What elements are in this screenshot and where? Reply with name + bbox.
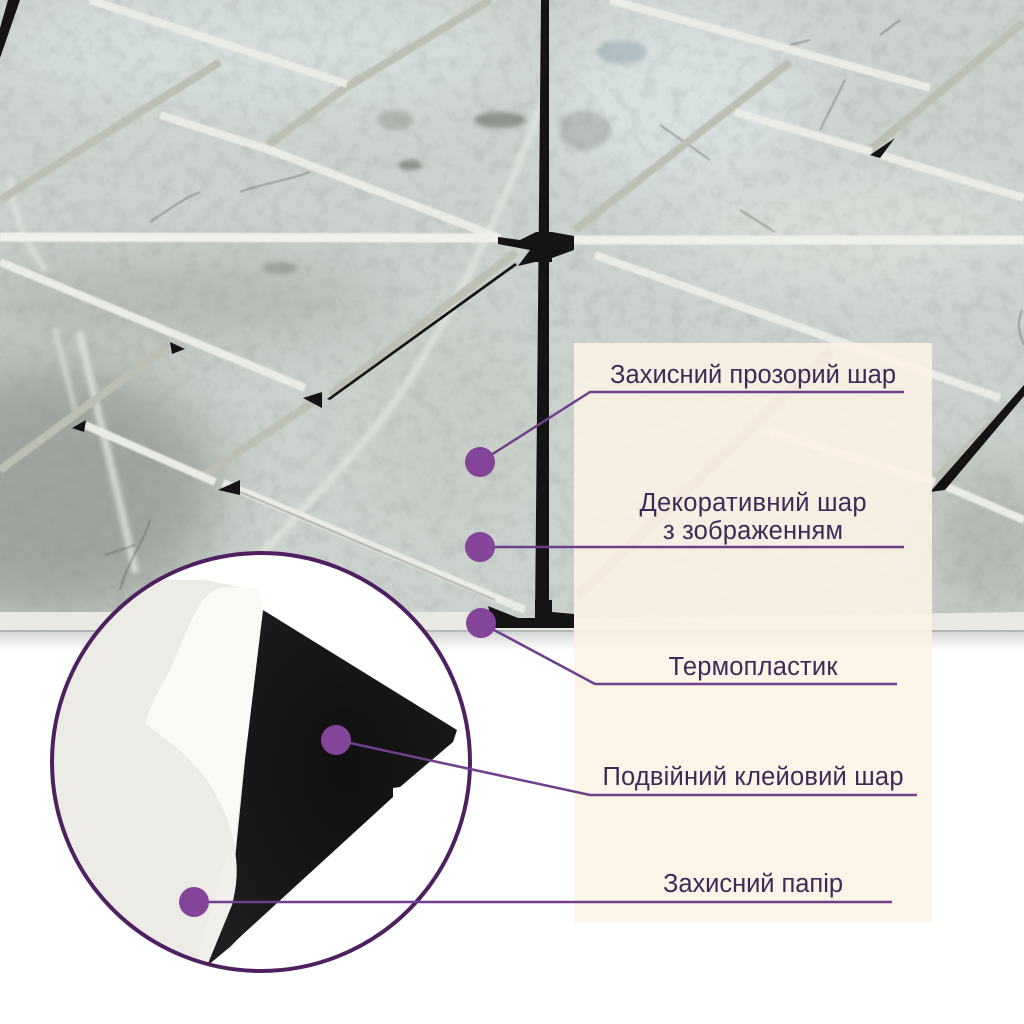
flat protective paper bbox=[54, 580, 248, 959]
callout: protective clear layer: Захисний прозорий шар bbox=[610, 361, 896, 389]
black adhesive layer bbox=[207, 610, 457, 966]
curled paper flap bbox=[145, 587, 263, 850]
panel: cream overlay bbox=[574, 343, 932, 922]
callout: decorative image layer: з зображенням bbox=[663, 517, 843, 545]
gaps bbox=[0, 0, 1024, 620]
callout: decorative image layer: Декоративний шар bbox=[640, 489, 866, 517]
ridges between tiles bbox=[0, 0, 1024, 610]
callout: decorative image layer bbox=[465, 489, 904, 562]
tile surface photo bbox=[0, 0, 1024, 650]
callout: thermoplastic bbox=[466, 608, 897, 684]
callout: protective paper bbox=[179, 870, 892, 917]
callout: protective clear layer bbox=[465, 361, 904, 477]
inset circle: peeled backing bbox=[30, 553, 470, 971]
callout: thermoplastic: Термопластик bbox=[668, 653, 838, 681]
callout: double adhesive layer: Подвійний клейовий шар bbox=[602, 763, 904, 791]
callout: protective paper: Захисний папір bbox=[663, 870, 843, 898]
dark veins bbox=[105, 20, 1024, 590]
front edge of the tile bbox=[0, 612, 1024, 630]
callout: double adhesive layer bbox=[321, 725, 917, 795]
light veins bbox=[10, 110, 540, 570]
